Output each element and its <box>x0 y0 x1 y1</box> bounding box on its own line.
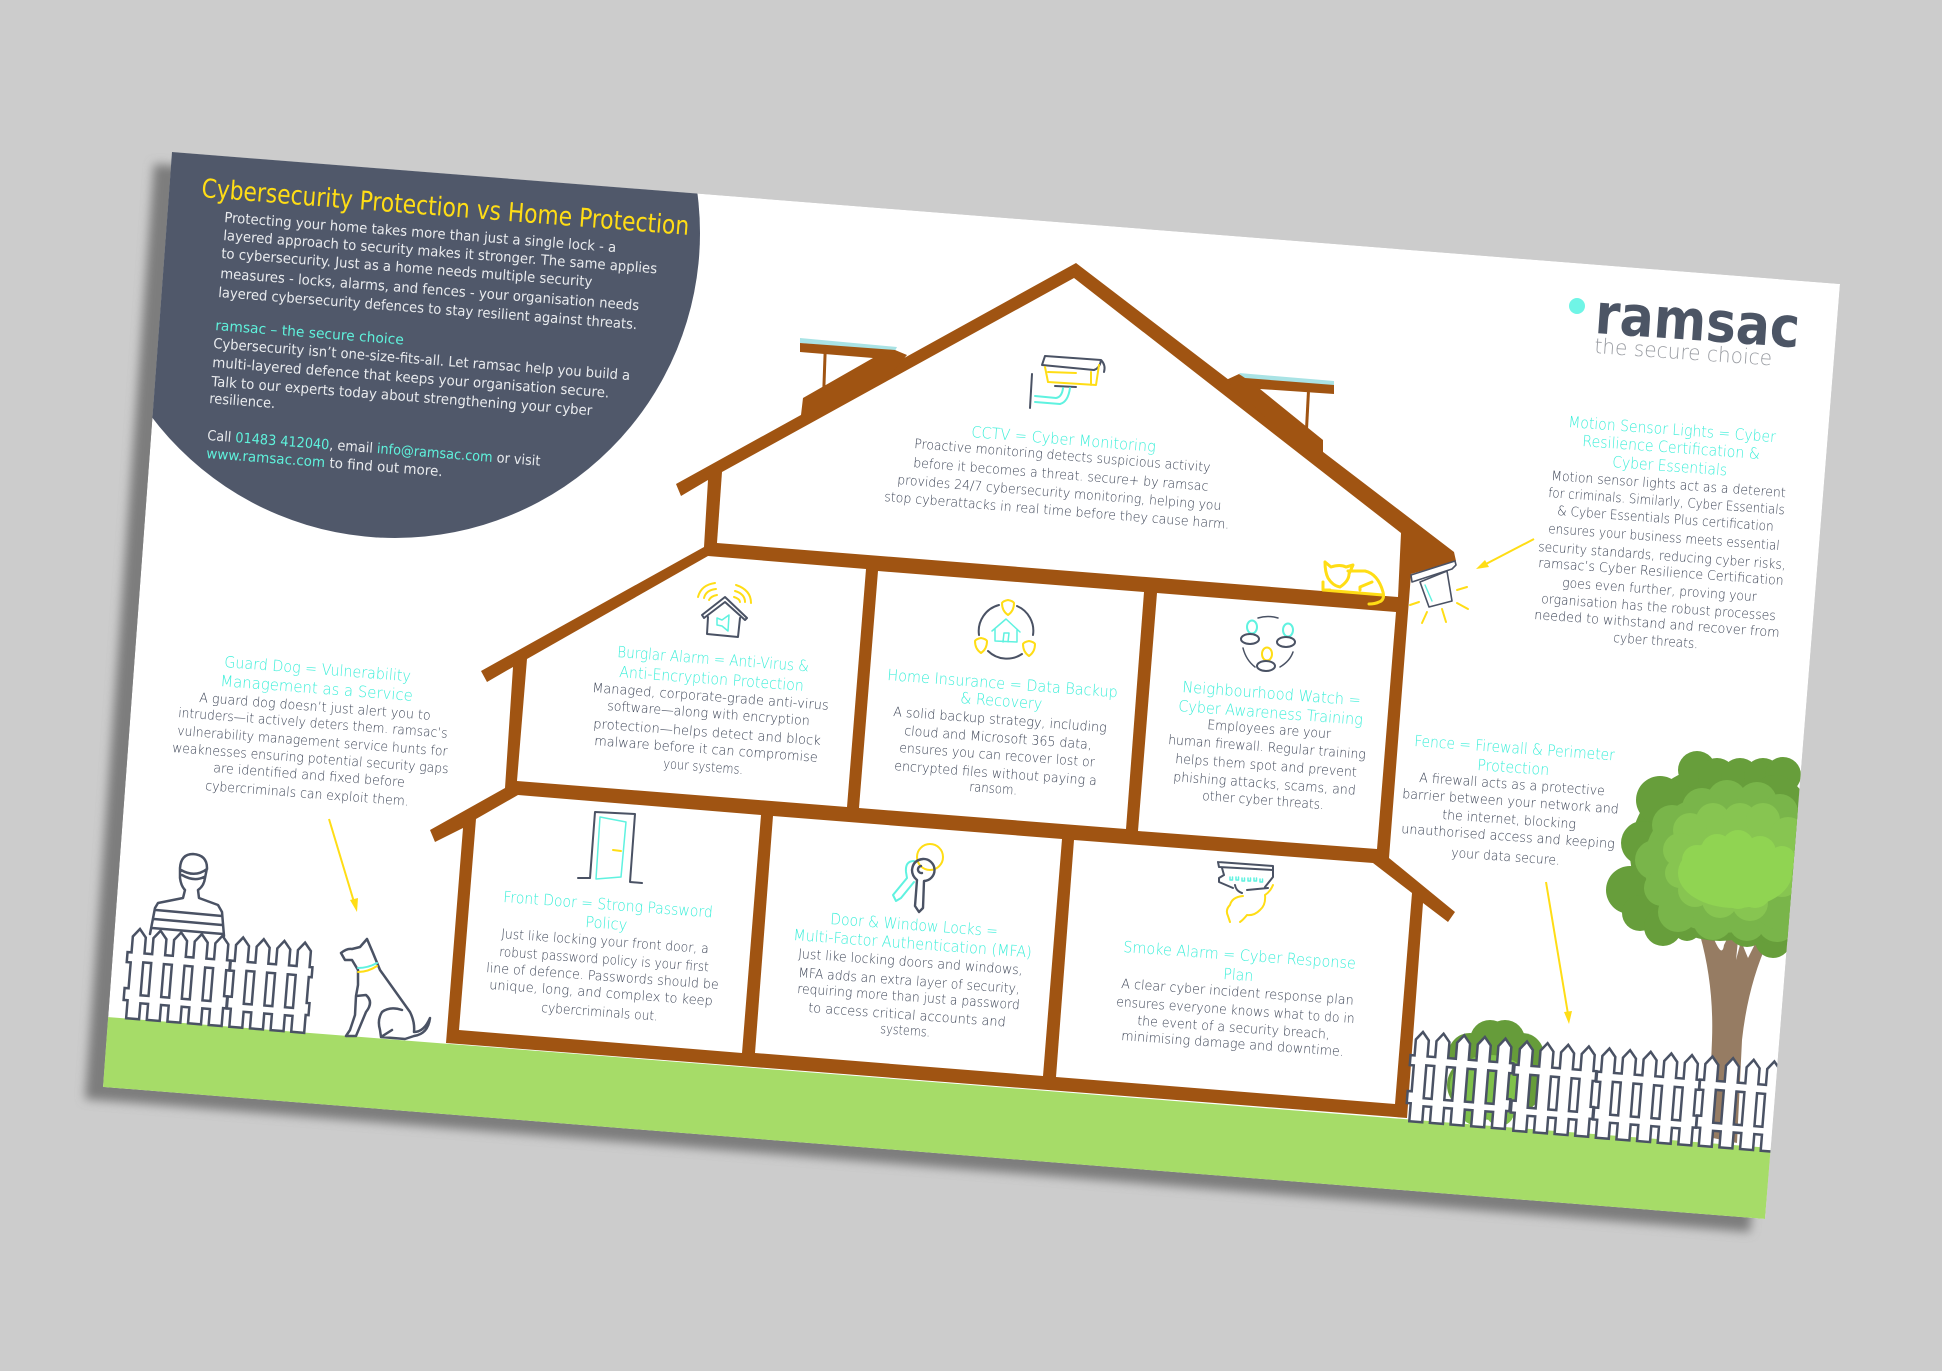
icon: keys <box>893 844 943 912</box>
text: motion sensor: & Cyber Essentials Plus certification <box>1557 504 1774 535</box>
title: Cybersecurity Protection vs Home Protection <box>200 174 690 242</box>
heading: motion sensor: Motion Sensor Lights = Cyber <box>1568 413 1777 446</box>
arrow: fence <box>1546 882 1572 1024</box>
page shadow <box>85 164 1822 1232</box>
poster page <box>103 152 1840 1219</box>
logo: ramsac: the secure choice <box>1594 334 1773 370</box>
ground <box>103 1017 1771 1219</box>
heading: door and window locks: Door & Window Locks = <box>830 910 999 940</box>
text: burglar alarm: malware before it can compromise <box>594 734 818 766</box>
text: cctv: before it becomes a threat. secure+ by ramsac <box>913 456 1209 495</box>
text: front door <box>486 927 719 1025</box>
arrow: guard dog <box>329 819 358 912</box>
icon: cat <box>1323 562 1384 604</box>
tree <box>1606 751 1820 1143</box>
heading: guard dog <box>220 653 414 705</box>
text: fence: unauthorised access and keeping <box>1401 822 1615 852</box>
text: motion sensor: cyber threats. <box>1613 631 1699 652</box>
panel: intro circle <box>152 152 700 538</box>
text: intro: measures - locks, alarms, and fences - your organisation needs <box>220 266 640 314</box>
text: motion sensor: security standards, reducing cyber risks, <box>1538 540 1786 573</box>
text: guard dog: vulnerability management service hunts for <box>177 724 449 760</box>
icon: smoke alarm <box>1218 862 1273 922</box>
text: door and window locks: MFA adds an extra layer of security, <box>798 966 1020 997</box>
heading: cctv: CCTV = Cyber Monitoring <box>971 423 1157 456</box>
text: neighbourhood watch: phishing attacks, scams, and <box>1173 770 1356 799</box>
text: burglar alarm: Managed, corporate-grade anti-virus <box>592 681 829 714</box>
icon: motion sensor light <box>1410 561 1468 623</box>
room: home insurance <box>859 571 1144 829</box>
text: neighbourhood watch: helps them spot and prevent <box>1175 752 1357 781</box>
heading: smoke alarm: Plan <box>1223 965 1254 985</box>
icon: cctv camera <box>1030 356 1105 408</box>
text: neighbourhood watch: Employees are your <box>1207 718 1332 742</box>
text: front door: robust password policy is your first <box>499 945 709 975</box>
room: door and window locks <box>755 816 1062 1076</box>
heading: motion sensor <box>1568 413 1777 479</box>
text: home insurance: A solid backup strategy, including <box>893 705 1107 736</box>
text: neighbourhood watch: human firewall. Regular training <box>1168 733 1366 763</box>
text: guard dog: intruders—it actively deters them. ramsac’s <box>178 706 448 742</box>
icon: right fence <box>1405 1031 1805 1154</box>
icon: guard dog <box>341 939 430 1039</box>
text: home insurance: encrypted files without paying a <box>894 759 1097 789</box>
heading: home insurance: & Recovery <box>960 689 1043 713</box>
heading: fence: Fence = Firewall & Perimeter <box>1414 732 1616 764</box>
text: cctv: provides 24/7 cybersecurity monitoring, helping you <box>897 473 1222 514</box>
text: ramsac pitch: Talk to our experts today about strengthening your cyber <box>210 374 593 419</box>
text: smoke alarm: ensures everyone knows what to do in <box>1116 995 1355 1027</box>
text: intro: layered cybersecurity defences to stay resilient against threats. <box>218 285 638 333</box>
text: burglar alarm: software—along with encryption <box>607 699 810 729</box>
text: front door: unique, long, and complex to keep <box>489 978 713 1009</box>
text: fence <box>1401 771 1619 869</box>
text: neighbourhood watch <box>1168 718 1366 813</box>
heading: neighbourhood watch: Neighbourhood Watch = <box>1182 678 1362 709</box>
text: guard dog: A guard dog doesn’t just alert you to <box>199 691 431 724</box>
text: motion sensor: Motion sensor lights act as a deterent <box>1551 469 1786 501</box>
text: home insurance: cloud and Microsoft 365 data, <box>904 724 1092 753</box>
icon: front door <box>578 812 642 883</box>
text: door and window locks: to access critical accounts and <box>808 1001 1006 1030</box>
text: smoke alarm <box>1116 977 1355 1060</box>
heading: door and window locks <box>795 912 1030 960</box>
text: guard dog: cybercriminals can exploit them. <box>205 779 409 810</box>
heading: guard dog: Guard Dog = Vulnerability <box>224 653 412 685</box>
text: door and window locks <box>797 947 1023 1041</box>
text: front door: Just like locking your front door, a <box>501 927 709 957</box>
room: smoke alarm <box>1056 840 1412 1104</box>
icon: burglar <box>150 854 224 936</box>
text: front door: line of defence. Passwords should be <box>486 961 719 993</box>
text: intro: to cybersecurity. Just as a home needs multiple security <box>221 246 593 291</box>
room: burglar alarm <box>517 556 866 807</box>
text: motion sensor: ramsac’s Cyber Resilience Certification <box>1538 556 1784 589</box>
text: front door: cybercriminals out. <box>541 1001 658 1025</box>
text: contact details: www.ramsac.com to find out more. <box>206 446 443 480</box>
text: fence: the internet, blocking <box>1442 808 1576 833</box>
text: home insurance <box>893 705 1107 799</box>
heading: burglar alarm: Anti-Encryption Protection <box>619 663 805 695</box>
bush <box>1447 1020 1554 1126</box>
room: attic <box>717 278 1401 597</box>
text: burglar alarm: your systems. <box>663 757 744 778</box>
text: ramsac pitch: resilience. <box>209 391 276 412</box>
heading: door and window locks: Multi-Factor Authentication (MFA) <box>793 926 1032 961</box>
subheading: the secure choice: ramsac – the secure choice <box>215 318 404 348</box>
icon: neighbourhood watch <box>1241 616 1295 671</box>
room: front door <box>459 795 761 1053</box>
text: home insurance: ransom. <box>969 780 1018 799</box>
text: door and window locks: Just like locking doors and windows, <box>798 947 1023 978</box>
text: motion sensor: needed to withstand and recover from <box>1534 608 1780 641</box>
text: door and window locks: requiring more than just a password <box>797 982 1020 1013</box>
text: ramsac pitch: Cybersecurity isn’t one-size-fits-all. Let ramsac help you build a <box>213 336 631 384</box>
heading: front door: Front Door = Strong Password <box>503 888 713 921</box>
house <box>430 263 1456 1118</box>
text: guard dog: are identified and fixed before <box>213 761 405 791</box>
text: fence: A firewall acts as a protective <box>1419 771 1605 799</box>
heading: neighbourhood watch <box>1178 678 1364 729</box>
text: smoke alarm: minimising damage and downtime. <box>1121 1029 1344 1060</box>
text: intro: layered approach to security makes it stronger. The same applies <box>223 228 658 277</box>
heading: burglar alarm: Burglar Alarm = Anti-Virus & <box>617 643 810 675</box>
text: cctv: Proactive monitoring detects suspicious activity <box>914 437 1211 476</box>
heading: fence: Protection <box>1477 756 1550 779</box>
text: neighbourhood watch: other cyber threats. <box>1202 789 1324 813</box>
text: contact details: Call 01483 412040, email info@ramsac.com or visit <box>207 428 541 470</box>
heading: guard dog: Management as a Service <box>220 672 414 705</box>
right dormer <box>1228 373 1334 452</box>
page background <box>103 152 1840 1219</box>
text: ramsac pitch <box>209 336 631 419</box>
text: motion sensor: ensures your business meets essential <box>1548 522 1780 554</box>
text: motion sensor <box>1534 469 1786 652</box>
text: ramsac pitch: multi-layered defence that keeps your organisation secure. <box>212 355 610 402</box>
room: neighbourhood watch <box>1138 593 1396 849</box>
text: intro: Protecting your home takes more than just a single lock - a <box>224 210 617 256</box>
icon: home insurance <box>975 600 1035 659</box>
text: door and window locks: systems. <box>880 1022 931 1041</box>
text: cctv: stop cyberattacks in real time before they cause harm. <box>884 490 1230 533</box>
icon: left fence <box>122 928 314 1033</box>
icon: burglar alarm <box>698 583 751 637</box>
heading: neighbourhood watch: Cyber Awareness Training <box>1178 697 1364 729</box>
heading: fence <box>1414 732 1616 779</box>
text: fence: your data secure. <box>1451 846 1561 869</box>
text: smoke alarm: the event of a security breach, <box>1137 1014 1330 1043</box>
text: guard dog <box>172 691 449 810</box>
text: smoke alarm: A clear cyber incident response plan <box>1121 977 1354 1009</box>
heading: smoke alarm: Smoke Alarm = Cyber Response <box>1123 938 1356 973</box>
text: home insurance: ensures you can recover lost or <box>899 741 1096 771</box>
text: burglar alarm: protection—helps detect and block <box>593 717 822 749</box>
text: motion sensor: goes even further, proving your <box>1562 576 1758 605</box>
text: motion sensor: for criminals. Similarly, Cyber Essentials <box>1548 486 1785 518</box>
text: guard dog: weaknesses ensuring potential security gaps <box>172 741 449 777</box>
text: intro <box>218 210 658 333</box>
heading: home insurance: Home Insurance = Data Backup <box>887 666 1118 701</box>
heading: motion sensor: Cyber Essentials <box>1612 453 1728 479</box>
heading: burglar alarm <box>618 646 808 691</box>
text: fence: barrier between your network and <box>1402 787 1619 818</box>
logo: ramsac: ramsac <box>1593 282 1802 361</box>
text: motion sensor: organisation has the robust processes <box>1541 592 1776 624</box>
text: burglar alarm <box>592 681 829 778</box>
heading: motion sensor: Resilience Certification & <box>1582 432 1761 463</box>
arrow: motion sensor <box>1476 539 1534 569</box>
house frame <box>430 263 1456 1118</box>
left dormer <box>800 338 907 415</box>
text: cctv <box>884 437 1230 533</box>
heading: front door: Policy <box>585 913 628 934</box>
